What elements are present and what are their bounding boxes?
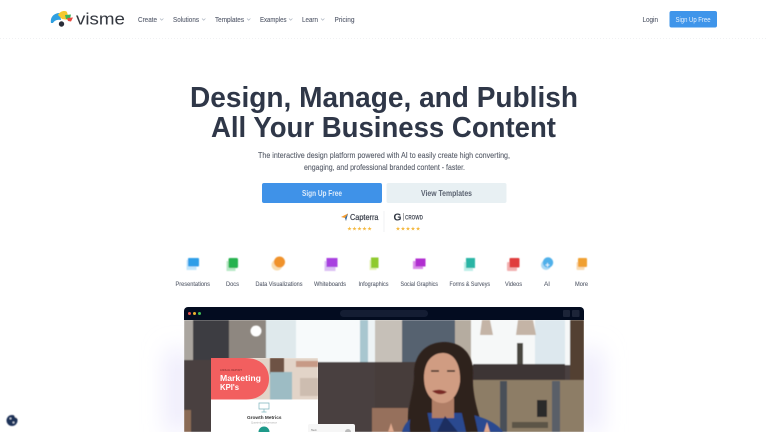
floating mini card [308,424,355,432]
category: more: More [575,282,589,288]
lavender glow behind preview [168,350,600,432]
category: data visualizations: Data Visualizations [256,282,302,288]
category: forms and surveys: Forms & Surveys [450,282,490,288]
headline: Design, Manage, and Publish [190,82,578,114]
growth metrics text [247,416,282,424]
headline: All Your Business Content [211,112,556,144]
category: ai [541,257,553,288]
visme logo: visme [76,10,125,28]
category: whiteboards: Whiteboards [314,282,346,288]
floating mini card: Text [311,428,317,432]
subheading: engaging, and professional branded content - faster. [304,162,465,172]
report card [211,358,318,432]
card photo and title: KPI's [220,383,240,392]
nav links: Pricing [334,17,355,24]
light ball [250,326,262,336]
app preview window [184,307,584,432]
growth metrics icon [259,403,269,412]
subheading [258,150,510,172]
growth metrics text: Quarterly performance [251,422,278,424]
category: data visualizations [256,256,302,288]
category: presentations: Presentations [176,282,210,288]
category: videos [505,258,522,288]
nav links: Examples [260,17,287,24]
presenter [388,342,503,432]
teal chart circle [258,426,270,432]
g2 crowd rating: G [394,212,402,224]
card photo and title [211,358,318,400]
capterra rating [341,212,379,232]
cookie settings icon [6,413,20,426]
button: view templates [386,183,506,203]
category: videos: Videos [505,282,522,288]
capterra rating: ★★★★★ [347,226,372,232]
category row [176,256,589,288]
button: sign up free [262,183,382,203]
category: more [575,258,589,288]
category: social graphics: Social Graphics [400,282,438,288]
card photo and title: Marketing [220,374,261,383]
category: whiteboards [314,258,346,288]
video still [184,320,584,432]
sign up button (header) [670,11,717,28]
category: social graphics [400,258,438,288]
nav links [138,17,355,24]
login link: Login [642,17,658,24]
nav links: Templates [215,17,244,24]
window title bar [184,307,584,320]
header navigation [51,10,717,28]
g2 crowd rating: ★★★★★ [396,226,421,232]
category: docs [226,258,239,288]
nav links: Solutions [173,17,199,24]
category: presentations [176,258,210,288]
button: sign up free: Sign Up Free [302,188,342,198]
growth metrics text: Growth Metrics [247,415,282,421]
headline [190,82,578,144]
card photo and title: ANNUAL REPORT [220,369,242,372]
g2 crowd rating: CROWD [405,214,423,222]
category: ai: AI [544,282,550,288]
nav links: Create [138,17,157,24]
category: infographics: Infographics [358,282,388,288]
category: docs: Docs [226,282,239,288]
category: infographics [358,258,388,288]
visme logo [51,10,125,28]
button: view templates: View Templates [421,188,472,198]
category: forms and surveys [450,258,490,288]
subheading: The interactive design platform powered with AI to easily create high converting, [258,150,510,160]
nav links: Learn [302,17,318,24]
sign up button (header): Sign Up Free [676,17,711,24]
g2 crowd rating [394,212,423,232]
capterra rating: Capterra [350,212,379,222]
